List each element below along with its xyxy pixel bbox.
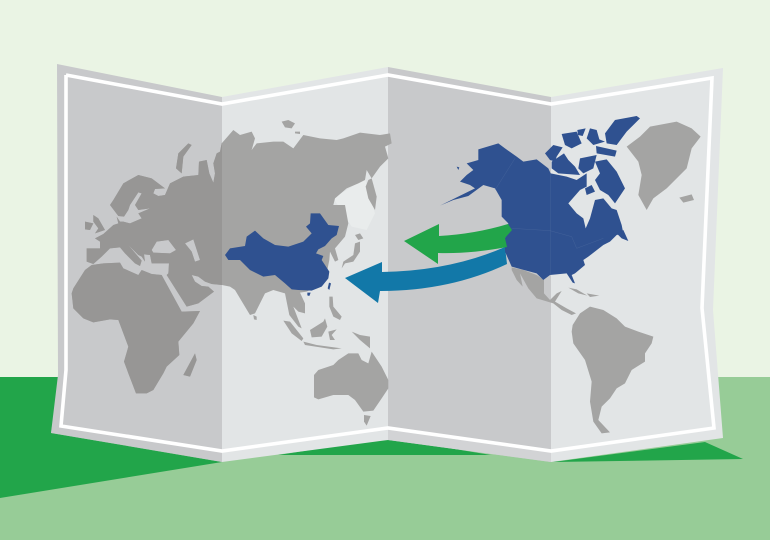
panel: fold 3	[388, 67, 551, 462]
panel: fold 4	[551, 68, 723, 462]
highlighted country: China	[225, 213, 339, 296]
panel: fold 2	[222, 67, 388, 462]
landmass: fold shading on Eurasia and Africa	[72, 143, 222, 394]
landmass: Greenland, Mexico, Central and South America	[512, 122, 701, 433]
arrow: green, North America to China	[404, 224, 512, 264]
ground	[0, 377, 770, 540]
map white border	[61, 75, 714, 451]
landmass: Asia-Pacific islands and Australia	[253, 120, 388, 426]
folded map sheet	[51, 64, 723, 462]
highlighted country: United States and Canada	[440, 116, 640, 283]
background sky	[0, 0, 770, 378]
map shadow	[0, 377, 743, 498]
arrow: blue, North America to China	[345, 247, 507, 303]
panel: fold 1	[51, 64, 222, 462]
landmass: Eurasia and Africa	[72, 130, 392, 393]
country borders: faint lines in North America	[495, 158, 603, 275]
